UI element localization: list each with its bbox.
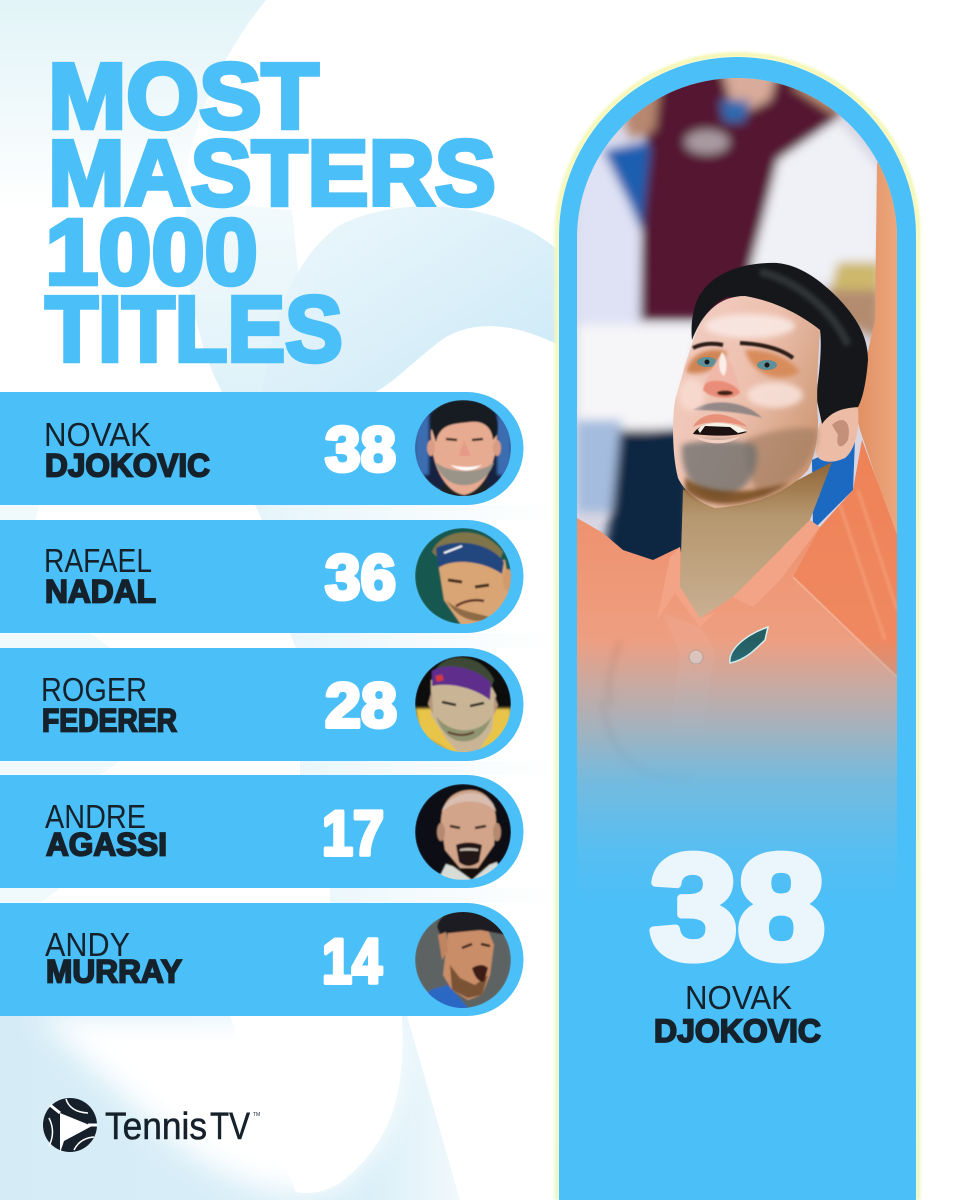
lacoste crocodile <box>730 627 768 663</box>
name: RAFAEL <box>44 542 152 579</box>
panel: ranking row Agassi <box>0 775 524 888</box>
ear <box>816 406 858 462</box>
portrait: Agassi <box>415 784 511 880</box>
panel: ranking row Murray <box>0 903 524 1016</box>
collar <box>657 520 820 627</box>
title <box>45 44 496 381</box>
name: DJOKOVIC <box>45 448 210 484</box>
panel: ranking row Djokovic <box>0 392 524 505</box>
hair <box>692 263 868 424</box>
portrait: Nadal <box>415 528 513 626</box>
shirt <box>577 440 897 837</box>
name <box>45 926 182 990</box>
title: MOST <box>48 44 319 148</box>
number 36: 36 <box>325 543 396 613</box>
featured name <box>654 979 821 1049</box>
neck <box>680 462 832 618</box>
right sleeve <box>793 440 897 677</box>
panel: ranking row Nadal <box>0 520 524 633</box>
mouth <box>692 414 748 443</box>
name: ROGER <box>41 671 147 708</box>
face <box>673 296 820 508</box>
icon: tennis ball play mark <box>43 1098 97 1153</box>
name: FEDERER <box>42 702 177 738</box>
panel: featured player arch <box>557 54 918 1200</box>
name: NOVAK <box>44 416 151 453</box>
wordmark: Tennis <box>105 1106 207 1148</box>
nose <box>703 352 740 398</box>
shirt folds <box>614 644 619 656</box>
featured name: DJOKOVIC <box>654 1013 821 1049</box>
glow outline <box>557 54 918 1200</box>
big number 38: 38 <box>650 825 825 990</box>
forehead highlight <box>705 314 795 338</box>
name <box>45 798 167 862</box>
beard <box>682 402 818 504</box>
background blue behind shoulder <box>812 440 855 530</box>
number 38: 38 <box>325 415 396 485</box>
name: ANDRE <box>45 798 146 835</box>
eyes and brows <box>686 343 800 377</box>
featured name: NOVAK <box>685 979 792 1016</box>
title: 1000 <box>45 200 258 304</box>
name: ANDY <box>45 926 130 963</box>
name <box>44 416 210 484</box>
placket <box>666 616 708 646</box>
raised arm <box>855 150 897 540</box>
portrait: Djokovic <box>415 400 511 500</box>
shirt button <box>689 650 703 664</box>
portrait: Murray <box>415 908 511 1010</box>
trademark: TM <box>253 1112 260 1118</box>
panel: ranking row Federer <box>0 648 524 761</box>
name <box>44 542 156 610</box>
title: MASTERS <box>48 121 496 225</box>
wordmark: TV <box>210 1106 251 1148</box>
bottom fade <box>577 640 897 902</box>
name <box>41 671 177 738</box>
title: TITLES <box>45 277 343 381</box>
arch background <box>559 57 916 1200</box>
name: MURRAY <box>46 954 182 990</box>
number 28: 28 <box>325 671 397 741</box>
portrait: Federer <box>415 656 511 760</box>
number 17: 17 <box>322 799 384 869</box>
number 14: 14 <box>322 927 382 997</box>
logo: Tennis TV <box>43 1098 260 1153</box>
name: NADAL <box>45 574 156 610</box>
name: AGASSI <box>46 826 167 862</box>
photo: Djokovic celebrating <box>577 70 897 902</box>
